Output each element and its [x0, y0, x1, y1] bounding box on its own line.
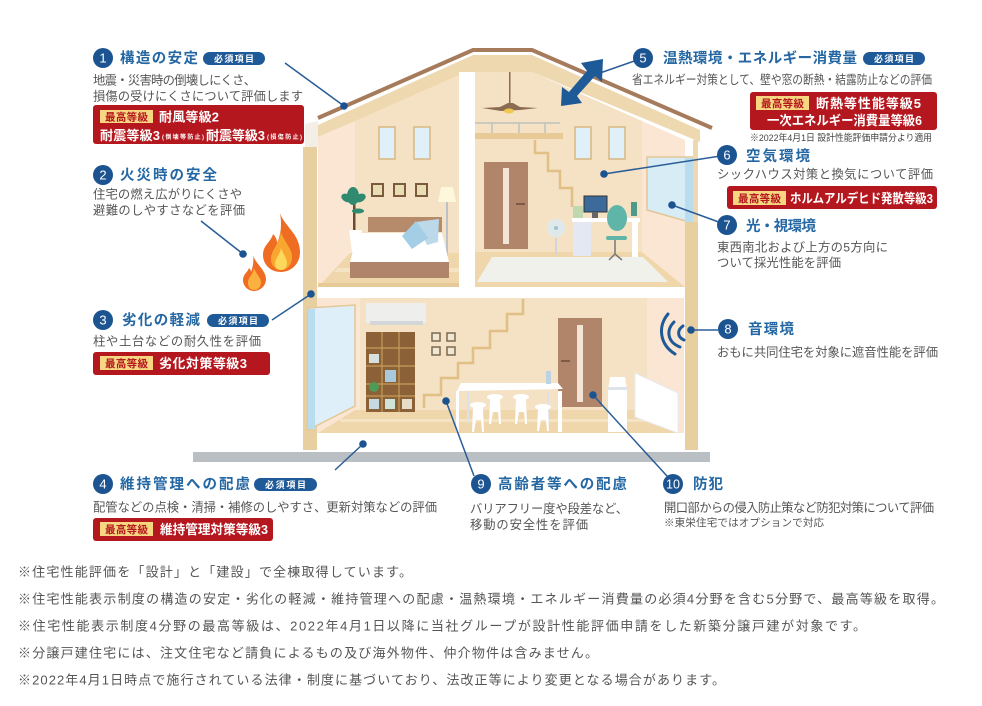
- top grade box: [93, 352, 270, 375]
- top grade box: 最高等級: [738, 192, 782, 205]
- icon: double arrow: [561, 59, 603, 106]
- top grade box: 最高等級: [105, 523, 148, 536]
- description: 避難のしやすさなどを評価: [93, 202, 245, 218]
- number: 4: [99, 476, 107, 492]
- door: [484, 162, 528, 249]
- number: [663, 474, 683, 494]
- top grade box: 耐震等級3: [206, 128, 265, 143]
- left window: [308, 305, 355, 430]
- lamp: [438, 187, 456, 256]
- top grade box: 維持管理対策等級3: [160, 522, 268, 537]
- top grade box: 一次エネルギー消費量等級6: [767, 113, 922, 128]
- leader: [201, 221, 247, 258]
- item 5 thermal: [561, 48, 937, 144]
- pictures: [432, 333, 455, 355]
- description: 柱や土台などの耐久性を評価: [93, 334, 261, 348]
- upper floor right room: [475, 72, 693, 287]
- number: 3: [99, 312, 107, 328]
- top grade box: (損傷防止): [267, 133, 302, 141]
- heading: 温熱環境・エネルギー消費量: [663, 49, 857, 67]
- item 8 sound: [662, 314, 938, 360]
- description: 地震・災害時の倒壊しにくさ、: [93, 72, 256, 88]
- leader: [589, 391, 667, 476]
- top grade box: 劣化対策等級3: [159, 356, 247, 371]
- radiator: [635, 373, 678, 433]
- description: 東西南北および上方の5方向に: [717, 240, 888, 254]
- footnotes: [18, 564, 944, 688]
- heading: 火災時の安全: [120, 166, 218, 184]
- required pill: 必須項目: [214, 53, 254, 64]
- footnotes: ※2022年4月1日時点で施行されている法律・制度に基づいており、法改正等により変更となる場合があります。: [18, 672, 725, 688]
- windows: [575, 127, 625, 159]
- number: 1: [99, 50, 107, 66]
- top grade box: (倒壊等防止): [162, 133, 204, 141]
- description: バリアフリー度や段差など、: [470, 501, 628, 516]
- stairs: [424, 299, 523, 408]
- chair: [606, 205, 627, 260]
- top grade box: [93, 518, 273, 541]
- leader: [442, 397, 474, 476]
- footnotes: ※住宅性能表示制度の構造の安定・劣化の軽減・維持管理への配慮・温熱環境・エネルギー消費量の必須4分野を含む5分野で、最高等級を取得。: [18, 592, 944, 606]
- pictures: [372, 184, 427, 196]
- roof: [305, 50, 712, 147]
- leader: [668, 201, 727, 225]
- plant: [340, 187, 367, 252]
- floor band between storeys: [317, 287, 685, 298]
- item 6 air: [600, 145, 937, 209]
- rug: [477, 257, 668, 282]
- item 1 structure: [93, 48, 348, 144]
- trash bin: [608, 377, 627, 432]
- heading: 高齢者等への配慮: [498, 475, 627, 493]
- description: 省エネルギー対策として、壁や窓の断熱・結露防止などの評価: [632, 72, 932, 87]
- stairs: [535, 140, 572, 207]
- number: 2: [99, 168, 107, 182]
- leader: [600, 155, 727, 178]
- required pill: [863, 52, 925, 65]
- bookshelf: [366, 332, 415, 412]
- number: 7: [723, 218, 731, 232]
- description: おもに共同住宅を対象に遮音性能を評価: [717, 344, 938, 360]
- heading: 防犯: [693, 475, 724, 493]
- upper floor left room: [318, 75, 459, 287]
- number: [471, 474, 491, 494]
- lower floor: [308, 298, 684, 433]
- icon: flames: [243, 213, 300, 291]
- required pill: [254, 478, 317, 491]
- top grade box: 耐風等級2: [159, 110, 219, 124]
- required pill: [207, 314, 269, 327]
- loft railing: [475, 123, 563, 139]
- footnotes: ※分譲戸建住宅には、注文住宅など請負によるもの及び海外物件、仲介物件は含みません。: [18, 646, 598, 660]
- electric fan: [547, 219, 565, 255]
- description: シックハウス対策と換気について評価: [717, 166, 933, 182]
- heading: 音環境: [748, 321, 794, 338]
- ground: [193, 452, 710, 462]
- number: 9: [477, 476, 485, 492]
- top grade box: [727, 186, 937, 209]
- number: 10: [666, 478, 680, 492]
- heading: 光・視環境: [746, 218, 816, 235]
- top grade box: 断熱等性能等級5: [816, 96, 921, 111]
- required pill: 必須項目: [265, 479, 306, 490]
- description: ついて採光性能を評価: [717, 255, 841, 270]
- item 4 maintenance: [93, 440, 437, 541]
- description: 開口部からの侵入防止策など防犯対策について評価: [664, 500, 934, 515]
- number: [633, 48, 653, 68]
- bed: [350, 217, 449, 278]
- item 3 deterioration: [93, 290, 315, 375]
- air conditioner: [366, 303, 426, 325]
- ceiling fan: [482, 72, 538, 114]
- icon: sound waves: [662, 314, 684, 354]
- item 2 fire: [93, 165, 300, 291]
- footnotes: ※住宅性能表示制度4分野の最高等級は、2022年4月1日以降に当社グループが設計性能評価申請をした新築分譲戸建が対象です。: [18, 618, 866, 634]
- heading: 維持管理への配慮: [120, 475, 250, 493]
- door: [558, 318, 602, 407]
- number: [718, 319, 738, 339]
- description: 配管などの点検・清掃・補修のしやすさ、更新対策などの評価: [93, 500, 437, 514]
- desk: [572, 196, 640, 257]
- number: 5: [639, 50, 647, 66]
- top grade box: 最高等級: [105, 110, 148, 123]
- house illustration: [193, 50, 712, 462]
- leader: [285, 63, 348, 110]
- top grade box: 最高等級: [761, 97, 804, 110]
- heading: 空気環境: [746, 147, 810, 165]
- posts: [303, 140, 698, 450]
- top grade box: 耐震等級3: [100, 128, 160, 143]
- windows: [379, 127, 430, 159]
- leader: [600, 58, 643, 73]
- heading: 構造の安定: [120, 49, 198, 67]
- number: [93, 48, 113, 68]
- number: [717, 145, 737, 165]
- number: 8: [724, 322, 732, 336]
- top grade box: [750, 92, 937, 130]
- footnote: ※2022年4月1日 設計性能評価申請分より適用: [750, 132, 932, 144]
- leader: [272, 290, 315, 320]
- leader: [335, 440, 367, 470]
- number: [717, 215, 737, 235]
- number: [93, 310, 113, 330]
- top grade box: 最高等級: [105, 357, 148, 370]
- note: ※東栄住宅ではオプションで対応: [664, 516, 824, 529]
- top grade box: ホルムアルデヒド発散等級3: [790, 191, 933, 206]
- description: 住宅の燃え広がりにくさや: [93, 186, 242, 202]
- item 7 light: [668, 201, 888, 270]
- table: [456, 371, 563, 432]
- item 10 security: [589, 391, 934, 529]
- description: 損傷の受けにくさについて評価します: [93, 88, 303, 104]
- required pill: [203, 52, 265, 65]
- description: 移動の安全性を評価: [470, 518, 588, 532]
- side window: [647, 157, 693, 223]
- item 9 accessibility: [442, 397, 628, 532]
- number: [93, 474, 113, 494]
- footnotes: ※住宅性能評価を「設計」と「建設」で全棟取得しています。: [18, 564, 412, 580]
- required pill: 必須項目: [218, 315, 258, 326]
- stools: [470, 394, 551, 432]
- number: [93, 165, 113, 185]
- number: 6: [723, 148, 731, 162]
- central white column: [459, 72, 475, 287]
- top grade box: [93, 105, 304, 144]
- required pill: 必須項目: [874, 53, 914, 64]
- leader: [687, 326, 718, 334]
- heading: 劣化の軽減: [122, 311, 200, 329]
